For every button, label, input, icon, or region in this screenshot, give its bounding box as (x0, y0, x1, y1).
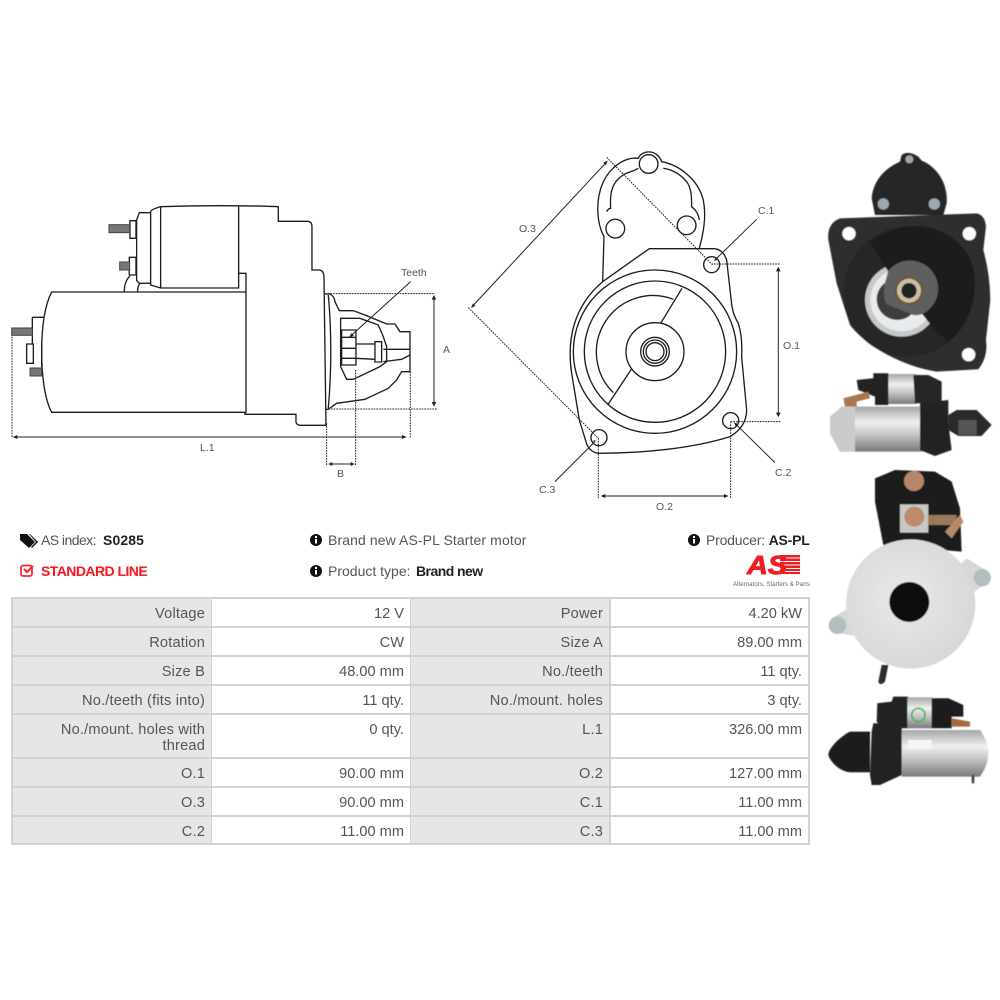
row: O.1 and O.2: O.1 (181, 766, 205, 782)
row: teeth fits into and mount holes: No./mount. holes (490, 692, 603, 708)
row: voltage and power: Power (561, 606, 603, 622)
photo: starter side view 2 (828, 697, 988, 785)
specification table (11, 597, 810, 845)
row: C.2 and C.3: 11.00 mm (738, 824, 802, 840)
row: rotation and size A: CW (380, 634, 404, 650)
photo: starter front face (828, 153, 990, 372)
row: C.2 and C.3: C.3 (580, 824, 603, 840)
front view labels: O.2 (656, 501, 673, 513)
row: threaded holes and L.1: 326.00 mm (729, 722, 802, 738)
row: rotation and size A (13, 628, 808, 655)
side view technical drawing (12, 206, 437, 466)
row: teeth fits into and mount holes: 11 qty. (362, 692, 404, 708)
row: C.2 and C.3 (13, 817, 808, 843)
side view labels: A (443, 344, 450, 356)
product type: Product type: (328, 563, 410, 579)
front view labels: C.2 (775, 467, 792, 479)
front view labels: C.3 (539, 484, 556, 496)
row: threaded holes and L.1: No./mount. holes with (61, 722, 205, 738)
AS index: AS index: (41, 532, 96, 548)
row: size B and teeth: No./teeth (542, 664, 603, 680)
front view technical drawing (468, 152, 781, 498)
row: threaded holes and L.1: 0 qty. (369, 722, 404, 738)
row: O.3 and C.1: O.3 (181, 794, 205, 810)
row: voltage and power: 4.20 kW (748, 606, 802, 622)
dimension lines (468, 157, 781, 498)
row: voltage and power: Voltage (155, 606, 205, 622)
row: O.1 and O.2: 90.00 mm (339, 766, 404, 782)
icons: info circles (310, 534, 700, 577)
row: teeth fits into and mount holes: No./teeth (fits into) (82, 692, 205, 708)
row: O.3 and C.1: 11.00 mm (738, 794, 802, 810)
row: O.3 and C.1: C.1 (580, 794, 603, 810)
solenoid housing (598, 152, 705, 282)
nose housing and pinion (325, 294, 410, 409)
row: size B and teeth: 11 qty. (760, 664, 802, 680)
photo: starter rear face (828, 470, 991, 684)
row: rotation and size A: Size A (561, 634, 603, 650)
terminal studs (12, 225, 130, 376)
row: voltage and power: 12 V (374, 606, 404, 622)
row: C.2 and C.3: 11.00 mm (340, 824, 404, 840)
row: teeth fits into and mount holes: 3 qty. (767, 692, 802, 708)
product type (328, 563, 484, 579)
front view labels: O.1 (783, 340, 800, 352)
icon: tags (20, 534, 38, 548)
dimension lines (12, 282, 437, 465)
row: O.1 and O.2: 127.00 mm (729, 766, 802, 782)
producer: Producer: AS-PL (706, 532, 810, 548)
front view labels: C.1 (758, 205, 774, 217)
front view labels: O.3 (519, 223, 536, 235)
row: O.3 and C.1 (13, 788, 808, 815)
mounting flange (570, 249, 747, 453)
icon: red checkbox (21, 566, 33, 576)
photo: starter side view 1 (830, 373, 992, 456)
side view labels: B (337, 468, 344, 480)
dimension arrowheads (13, 295, 436, 466)
row: voltage and power (13, 599, 808, 626)
row: threaded holes and L.1: L.1 (582, 722, 603, 738)
row: C.2 and C.3: C.2 (182, 824, 205, 840)
dimension arrowheads (471, 161, 781, 498)
row: size B and teeth (13, 657, 808, 684)
row: rotation and size A: Rotation (149, 634, 205, 650)
brand logo (733, 550, 810, 588)
row: O.1 and O.2 (13, 759, 808, 786)
product description: Brand new AS-PL Starter motor (328, 532, 526, 548)
side view labels: L.1 (200, 442, 215, 454)
row: threaded holes and L.1: thread (163, 738, 205, 754)
row: teeth fits into and mount holes (13, 686, 808, 713)
side view labels: Teeth (401, 267, 427, 279)
row: size B and teeth: Size B (162, 664, 205, 680)
row: rotation and size A: 89.00 mm (737, 634, 802, 650)
side view labels (200, 267, 450, 480)
row: size B and teeth: 48.00 mm (339, 664, 404, 680)
row: O.3 and C.1: 90.00 mm (339, 794, 404, 810)
AS index (41, 532, 144, 548)
brand logo: Alternators, Starters & Parts (733, 581, 810, 588)
row: threaded holes and L.1 (13, 715, 808, 757)
AS index: S0285 (103, 532, 144, 548)
product type: Brand new (416, 563, 483, 579)
motor body outline (27, 206, 326, 425)
front view labels (519, 205, 800, 513)
brand logo: AS (746, 550, 788, 580)
standard line badge: STANDARD LINE (41, 563, 147, 579)
row: O.1 and O.2: O.2 (579, 766, 603, 782)
